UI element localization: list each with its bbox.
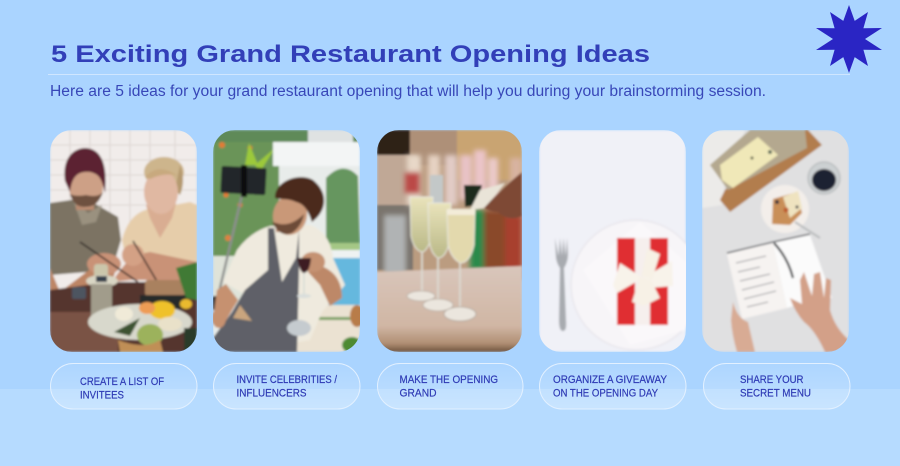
subtitle: Here are 5 ideas for your grand restaurant opening that will help you during your brainstorming session. [50, 83, 766, 100]
notebook [727, 243, 787, 319]
gift box [617, 238, 668, 325]
table [50, 282, 197, 352]
label pill: invite celebrities: INFLUENCERS [236, 387, 306, 399]
head [274, 228, 280, 234]
arms [50, 268, 116, 292]
photo: recipe notebook on marble [702, 130, 849, 352]
label pill: make the opening grand: GRAND [400, 387, 437, 399]
left arm [213, 284, 238, 322]
label pill: make the opening grand [378, 364, 523, 409]
fork [555, 238, 568, 331]
woman [122, 202, 197, 268]
label pill: invite celebrities [214, 364, 360, 409]
plate [684, 243, 686, 326]
wooden board [720, 130, 822, 212]
label pill: create a list: INVITEES [80, 389, 124, 401]
hands [731, 302, 755, 352]
man torso [50, 198, 121, 275]
label pill: create a list: CREATE A LIST OF [80, 376, 164, 388]
photo: champagne glasses [377, 130, 522, 352]
wine glass [297, 258, 311, 273]
champagne bottle and hand [464, 185, 482, 207]
title: 5 Exciting Grand Restaurant Opening Ideas [51, 41, 650, 68]
right arm [308, 265, 342, 306]
ceramic tower [94, 264, 108, 278]
towel [702, 130, 745, 208]
selfie stick and phone [218, 193, 244, 290]
platter [88, 304, 192, 340]
label pill: invite celebrities: INVITE CELEBRITIES / [236, 374, 337, 386]
apron [213, 228, 299, 352]
label pill: organize a giveaway [540, 364, 686, 409]
leaf garnish [176, 262, 197, 300]
baking dish [710, 130, 807, 190]
label pill: organize a giveaway: ORGANIZE A GIVEAWAY [553, 374, 667, 386]
label pill: share secret menu: SECRET MENU [740, 387, 811, 399]
bow [613, 261, 673, 293]
photo: couple with sushi platter [50, 130, 197, 352]
table [377, 266, 522, 352]
bottles [384, 150, 522, 280]
plate with slice [761, 185, 809, 233]
icon: star badge [816, 5, 882, 73]
label pill: create a list [50, 364, 197, 409]
photo: gift box on plate [539, 130, 702, 352]
label pill: share secret menu [704, 364, 850, 409]
label pill: make the opening grand: MAKE THE OPENING [400, 374, 498, 386]
berry bowl [808, 162, 840, 194]
cake [720, 137, 778, 188]
glasses [407, 197, 476, 321]
label pill: organize a giveaway: ON THE OPENING DAY [553, 387, 658, 399]
shirt [223, 225, 345, 345]
man face and hat [69, 164, 103, 208]
label pill: share secret menu: SHARE YOUR [740, 374, 804, 386]
photo: man taking selfie with wine [212, 130, 364, 353]
